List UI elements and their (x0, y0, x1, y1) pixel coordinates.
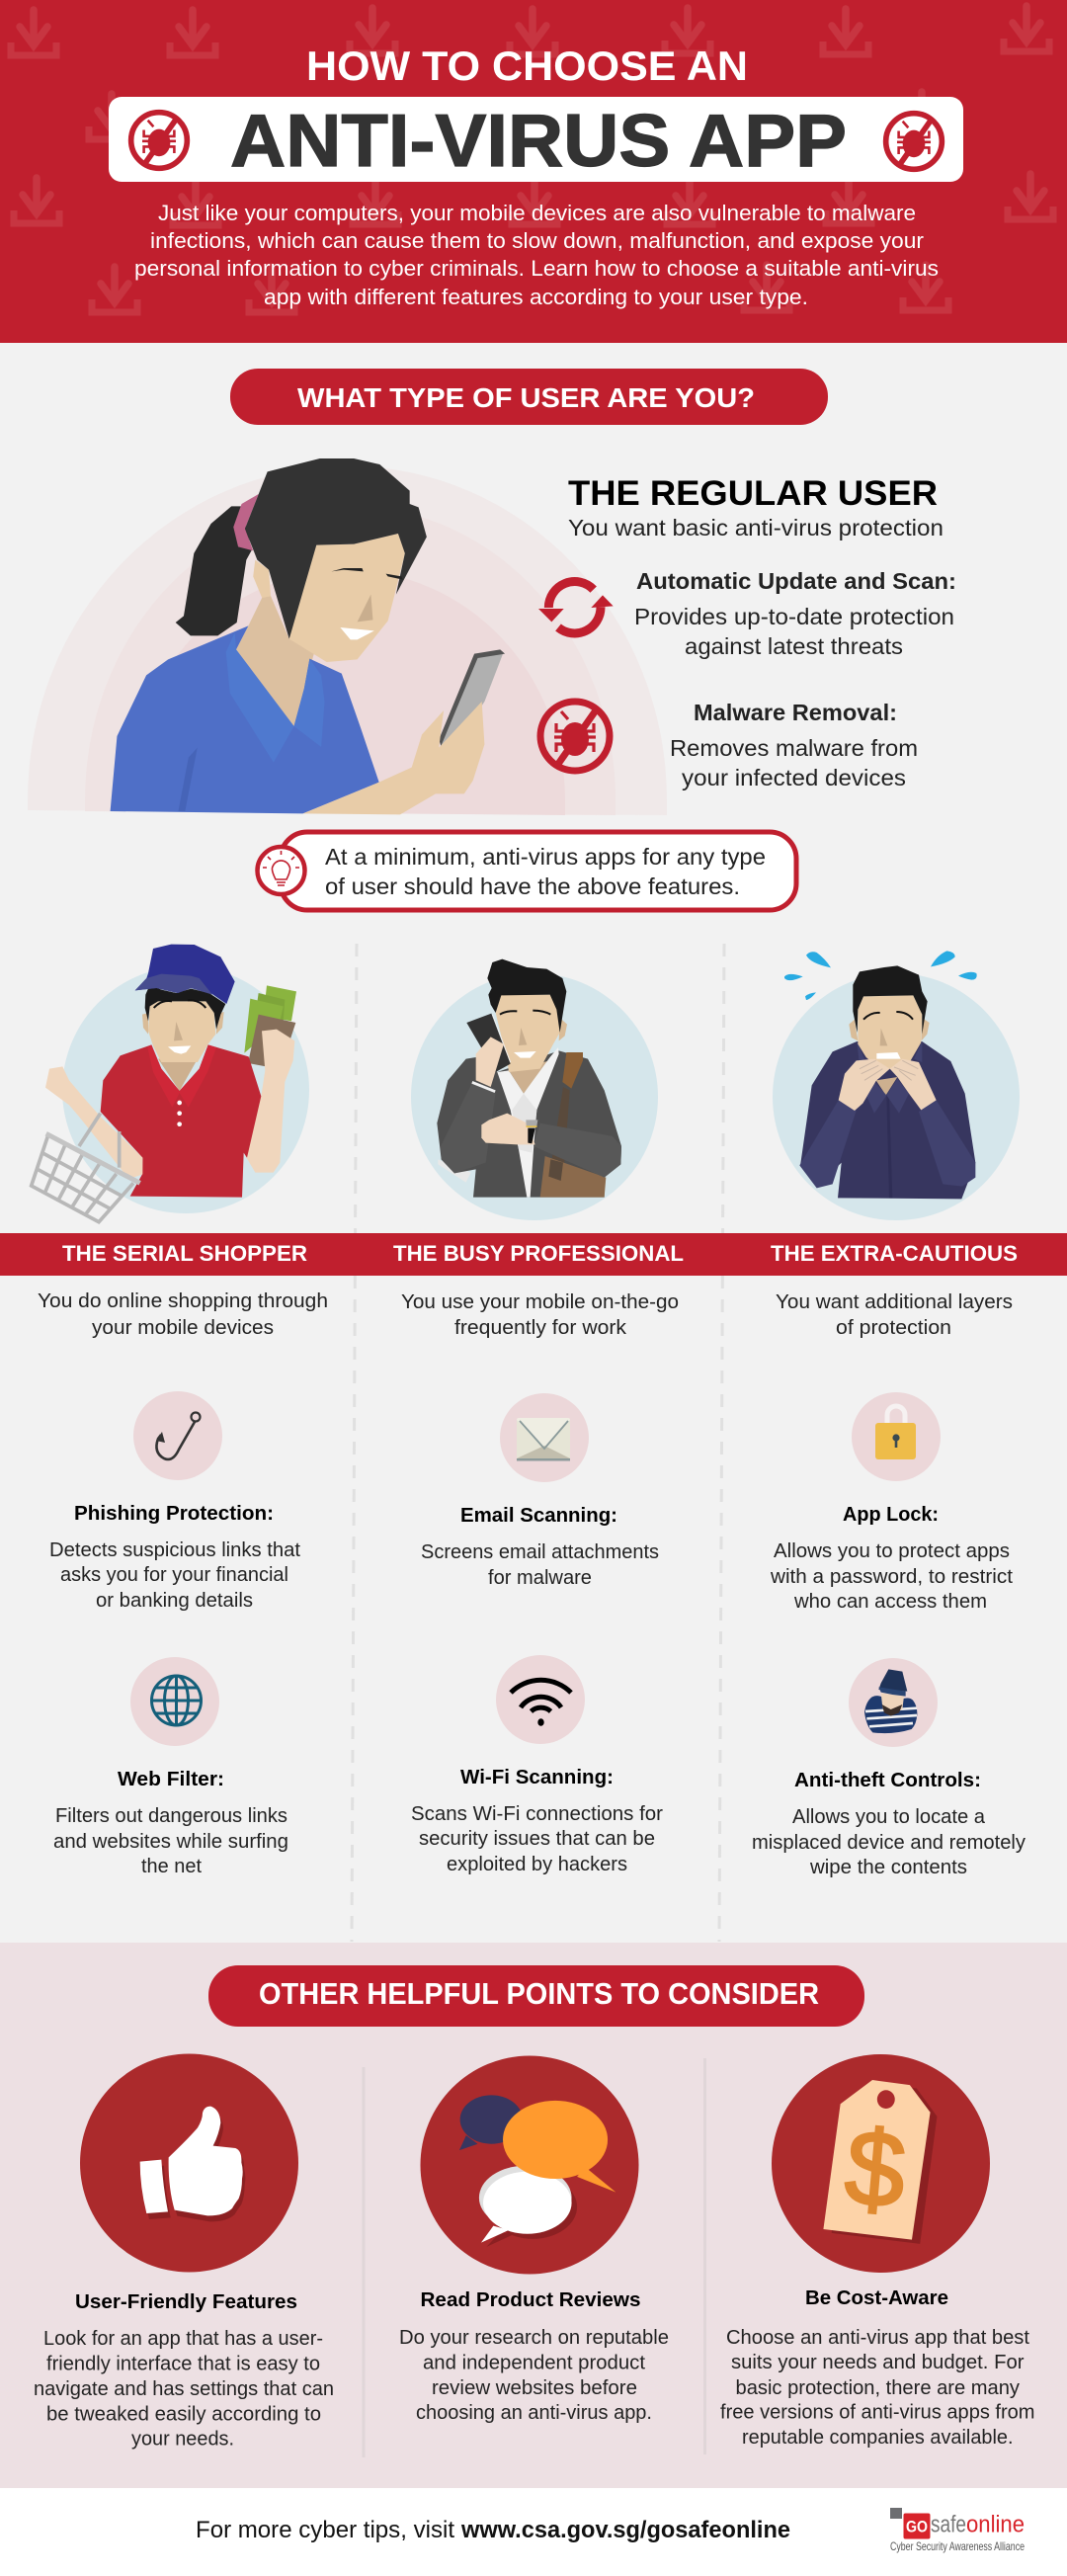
feature: web filter (53, 1769, 288, 1877)
feature: wi-fi scanning: security issues that can be (419, 1828, 655, 1850)
panel: other helpful points (0, 1943, 1067, 2488)
text: the regular user: You want basic anti-virus protection (568, 515, 944, 540)
title banner (109, 97, 963, 182)
logo: gosafeonline: GO (906, 2518, 928, 2535)
feature: phishing protection (49, 1503, 300, 1612)
heading pill: other helpful points (208, 1965, 864, 2027)
text: cautious description (776, 1291, 1013, 1339)
icon: wi-fi (496, 1655, 585, 1744)
point: user-friendly features: Look for an app that has a user- (43, 2328, 323, 2350)
text: cautious description: You want additional layers (776, 1291, 1013, 1313)
heading pill: what type of user (230, 369, 828, 425)
point: be cost-aware: Choose an anti-virus app that best (726, 2327, 1029, 2349)
text: the regular user: THE REGULAR USER (568, 474, 938, 513)
feature: anti-theft controls: wipe the contents (809, 1857, 967, 1878)
feature: malware removal: Removes malware from (670, 735, 918, 761)
intro paragraph (134, 201, 939, 309)
intro paragraph: personal information to cyber criminals. Learn how to choose a suitable anti-virus (134, 256, 939, 281)
point: user-friendly features: navigate and has settings that can (34, 2378, 334, 2400)
logo: gosafeonline: online (966, 2512, 1025, 2537)
intro paragraph: infections, which can cause them to slow down, malfunction, and expose your (150, 228, 924, 253)
feature: anti-theft controls: misplaced device and remotely (752, 1832, 1026, 1854)
text: professional description: frequently for work (454, 1317, 627, 1339)
feature: phishing protection: asks you for your financial (60, 1564, 288, 1586)
title: how to choose an: HOW TO CHOOSE AN (306, 42, 748, 89)
point: user-friendly features: your needs. (131, 2429, 234, 2451)
point: user-friendly features (34, 2291, 334, 2451)
feature: anti-theft controls (752, 1770, 1026, 1878)
feature: app lock: who can access them (793, 1591, 987, 1613)
icon: no bug left (131, 113, 187, 168)
point: be cost-aware: basic protection, there are many (735, 2377, 1020, 2399)
feature: automatic update and scan (634, 568, 956, 659)
feature: malware removal: Malware Removal: (694, 700, 897, 725)
intro paragraph: app with different features according to your user type. (264, 285, 808, 309)
feature: phishing protection: Detects suspicious links that (49, 1539, 300, 1561)
heading pill: other helpful points: OTHER HELPFUL POINTS TO CONSIDER (259, 1976, 819, 2011)
band: user type titles: THE EXTRA-CAUTIOUS (771, 1241, 1018, 1266)
point: user-friendly features: friendly interface that is easy to (46, 2354, 320, 2375)
icon: no bug (540, 702, 610, 771)
feature: web filter: the net (141, 1856, 202, 1877)
point: be cost-aware: reputable companies available. (742, 2427, 1014, 2449)
feature: email scanning (421, 1505, 659, 1589)
band: user type titles: THE SERIAL SHOPPER (62, 1241, 307, 1266)
icon: phishing hook (133, 1391, 222, 1480)
feature: email scanning: Email Scanning: (460, 1505, 617, 1527)
footer text: www.csa.gov.sg/gosafeonline (460, 2517, 790, 2543)
feature: app lock: with a password, to restrict (770, 1566, 1013, 1588)
text: professional description (401, 1291, 679, 1339)
feature: anti-theft controls: Allows you to locate a (792, 1806, 986, 1828)
feature: automatic update and scan: Automatic Update and Scan: (636, 568, 956, 594)
text: professional description: You use your mobile on-the-go (401, 1291, 679, 1313)
footer text: For more cyber tips, visit (196, 2517, 454, 2543)
point: user-friendly features: be tweaked easily according to (46, 2403, 321, 2425)
callout: minimum features: At a minimum, anti-virus apps for any type (325, 844, 766, 870)
illustration: extra-cautious (773, 951, 1020, 1220)
feature: wi-fi scanning (411, 1767, 663, 1875)
heading pill: what type of user: WHAT TYPE OF USER ARE YOU? (297, 382, 755, 413)
feature: phishing protection: or banking details (96, 1590, 253, 1612)
icon: no bug right (886, 114, 942, 169)
band: user type titles: THE BUSY PROFESSIONAL (393, 1241, 684, 1266)
feature: malware removal: your infected devices (682, 765, 906, 790)
icon: padlock (852, 1392, 941, 1481)
feature: wi-fi scanning: exploited by hackers (447, 1854, 627, 1875)
icon: thief (849, 1658, 938, 1747)
point: read product reviews (399, 2289, 669, 2424)
background domes (28, 465, 667, 815)
text: shopper description: You do online shopping through (38, 1290, 328, 1312)
text: cautious description: of protection (836, 1317, 951, 1339)
dollar sign: $ (841, 2107, 910, 2230)
text: shopper description: your mobile devices (92, 1317, 274, 1339)
feature: email scanning: Screens email attachments (421, 1541, 659, 1563)
feature: web filter: Filters out dangerous links (55, 1805, 287, 1827)
illustration: serial shopper (32, 945, 309, 1222)
feature: web filter: Web Filter: (118, 1769, 224, 1790)
callout: minimum features: of user should have the above features. (325, 873, 740, 899)
feature: app lock: Allows you to protect apps (774, 1540, 1010, 1562)
footer text (196, 2517, 790, 2543)
icon: price tag (772, 2054, 990, 2273)
point: user-friendly features: User-Friendly Features (75, 2291, 297, 2313)
feature: anti-theft controls: Anti-theft Controls: (794, 1770, 981, 1791)
illustration: busy professional (411, 959, 658, 1220)
point: read product reviews: choosing an anti-virus app. (416, 2402, 652, 2424)
band: user type titles (0, 1233, 1067, 1276)
text: the regular user (568, 474, 944, 540)
icon: light bulb (257, 847, 304, 894)
feature: email scanning: for malware (488, 1567, 592, 1589)
logo: gosafeonline (890, 2508, 1025, 2553)
icon: globe (130, 1657, 219, 1746)
feature: app lock (770, 1504, 1013, 1613)
point: read product reviews: Do your research on reputable (399, 2327, 669, 2349)
feature: phishing protection: Phishing Protection: (74, 1503, 274, 1525)
panel: header (0, 0, 1067, 343)
feature: app lock: App Lock: (843, 1504, 939, 1526)
feature: automatic update and scan: Provides up-to-date protection (634, 604, 954, 629)
feature: wi-fi scanning: Scans Wi-Fi connections for (411, 1803, 663, 1825)
feature: web filter: and websites while surfing (53, 1831, 288, 1853)
icon: envelope (500, 1393, 589, 1482)
intro paragraph: Just like your computers, your mobile devices are also vulnerable to malware (158, 201, 916, 225)
point: be cost-aware: free versions of anti-virus apps from (720, 2401, 1035, 2423)
point: be cost-aware (720, 2287, 1035, 2449)
icon: refresh arrows (538, 582, 614, 633)
icon: speech bubbles (421, 2055, 638, 2275)
icon: thumbs up (80, 2053, 298, 2273)
point: read product reviews: review websites before (432, 2377, 637, 2399)
title: anti-virus app: ANTI-VIRUS APP (230, 99, 847, 182)
callout: minimum features (257, 832, 796, 910)
text: shopper description (38, 1290, 328, 1339)
feature: wi-fi scanning: Wi-Fi Scanning: (460, 1767, 614, 1788)
point: read product reviews: Read Product Reviews (421, 2289, 640, 2311)
point: be cost-aware: suits your needs and budget. For (731, 2352, 1025, 2373)
logo: gosafeonline: safe (931, 2512, 966, 2537)
point: read product reviews: and independent product (423, 2352, 645, 2373)
feature: automatic update and scan: against latest threats (685, 633, 903, 659)
illustration: regular user with phone (111, 458, 505, 814)
feature: malware removal (670, 700, 918, 790)
panel: footer (0, 2488, 1067, 2576)
point: be cost-aware: Be Cost-Aware (805, 2287, 948, 2309)
